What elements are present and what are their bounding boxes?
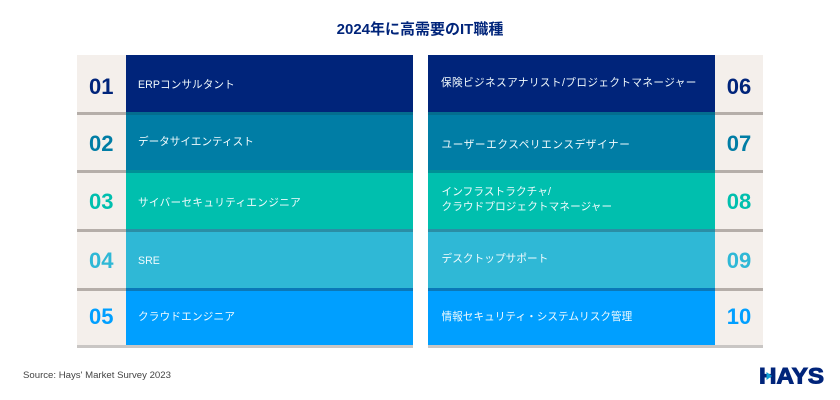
row 06: 保険ビジネスアナリスト/プロジェクトマネージャー <box>441 77 697 89</box>
row 07 <box>428 115 763 173</box>
row 02 <box>77 115 413 173</box>
row 05 <box>77 291 413 348</box>
row 07: 07 <box>727 131 751 156</box>
row 10: 情報セキュリティ・システムリスク管理 <box>442 311 632 323</box>
row 04: 04 <box>89 248 113 273</box>
row 10 <box>428 291 763 348</box>
row 05: クラウドエンジニア <box>138 311 235 323</box>
row 06 <box>428 55 763 115</box>
row 01: 01 <box>89 74 113 98</box>
row 02: データサイエンティスト <box>138 136 254 148</box>
title: 2024年に高需要のIT職種 <box>337 21 503 38</box>
source note: Source: Hays' Market Survey 2023 <box>23 370 171 381</box>
row 01: ERPコンサルタント <box>138 79 235 91</box>
panel: left ranking 01-05 <box>77 55 413 348</box>
row 04: SRE <box>138 255 160 267</box>
row 06: 06 <box>727 74 751 98</box>
row 03: サイバーセキュリティエンジニア <box>138 197 301 209</box>
row 09 <box>428 232 763 291</box>
row 08 <box>428 173 763 232</box>
row 08: クラウドプロジェクトマネージャー <box>442 201 612 213</box>
row 03: 03 <box>89 189 113 214</box>
row 08: 08 <box>727 189 751 214</box>
row 01 <box>77 55 413 115</box>
row 07: ユーザーエクスペリエンスデザイナー <box>442 139 630 151</box>
row 09: 09 <box>727 248 751 273</box>
row 02: 02 <box>89 131 113 156</box>
row 05: 05 <box>89 304 113 329</box>
panel: right ranking 06-10 <box>428 55 763 348</box>
row 03 <box>77 173 413 232</box>
row 10: 10 <box>727 304 751 329</box>
row 04 <box>77 232 413 291</box>
row 08: インフラストラクチャ/ <box>442 186 551 198</box>
row 09: デスクトップサポート <box>442 253 548 265</box>
